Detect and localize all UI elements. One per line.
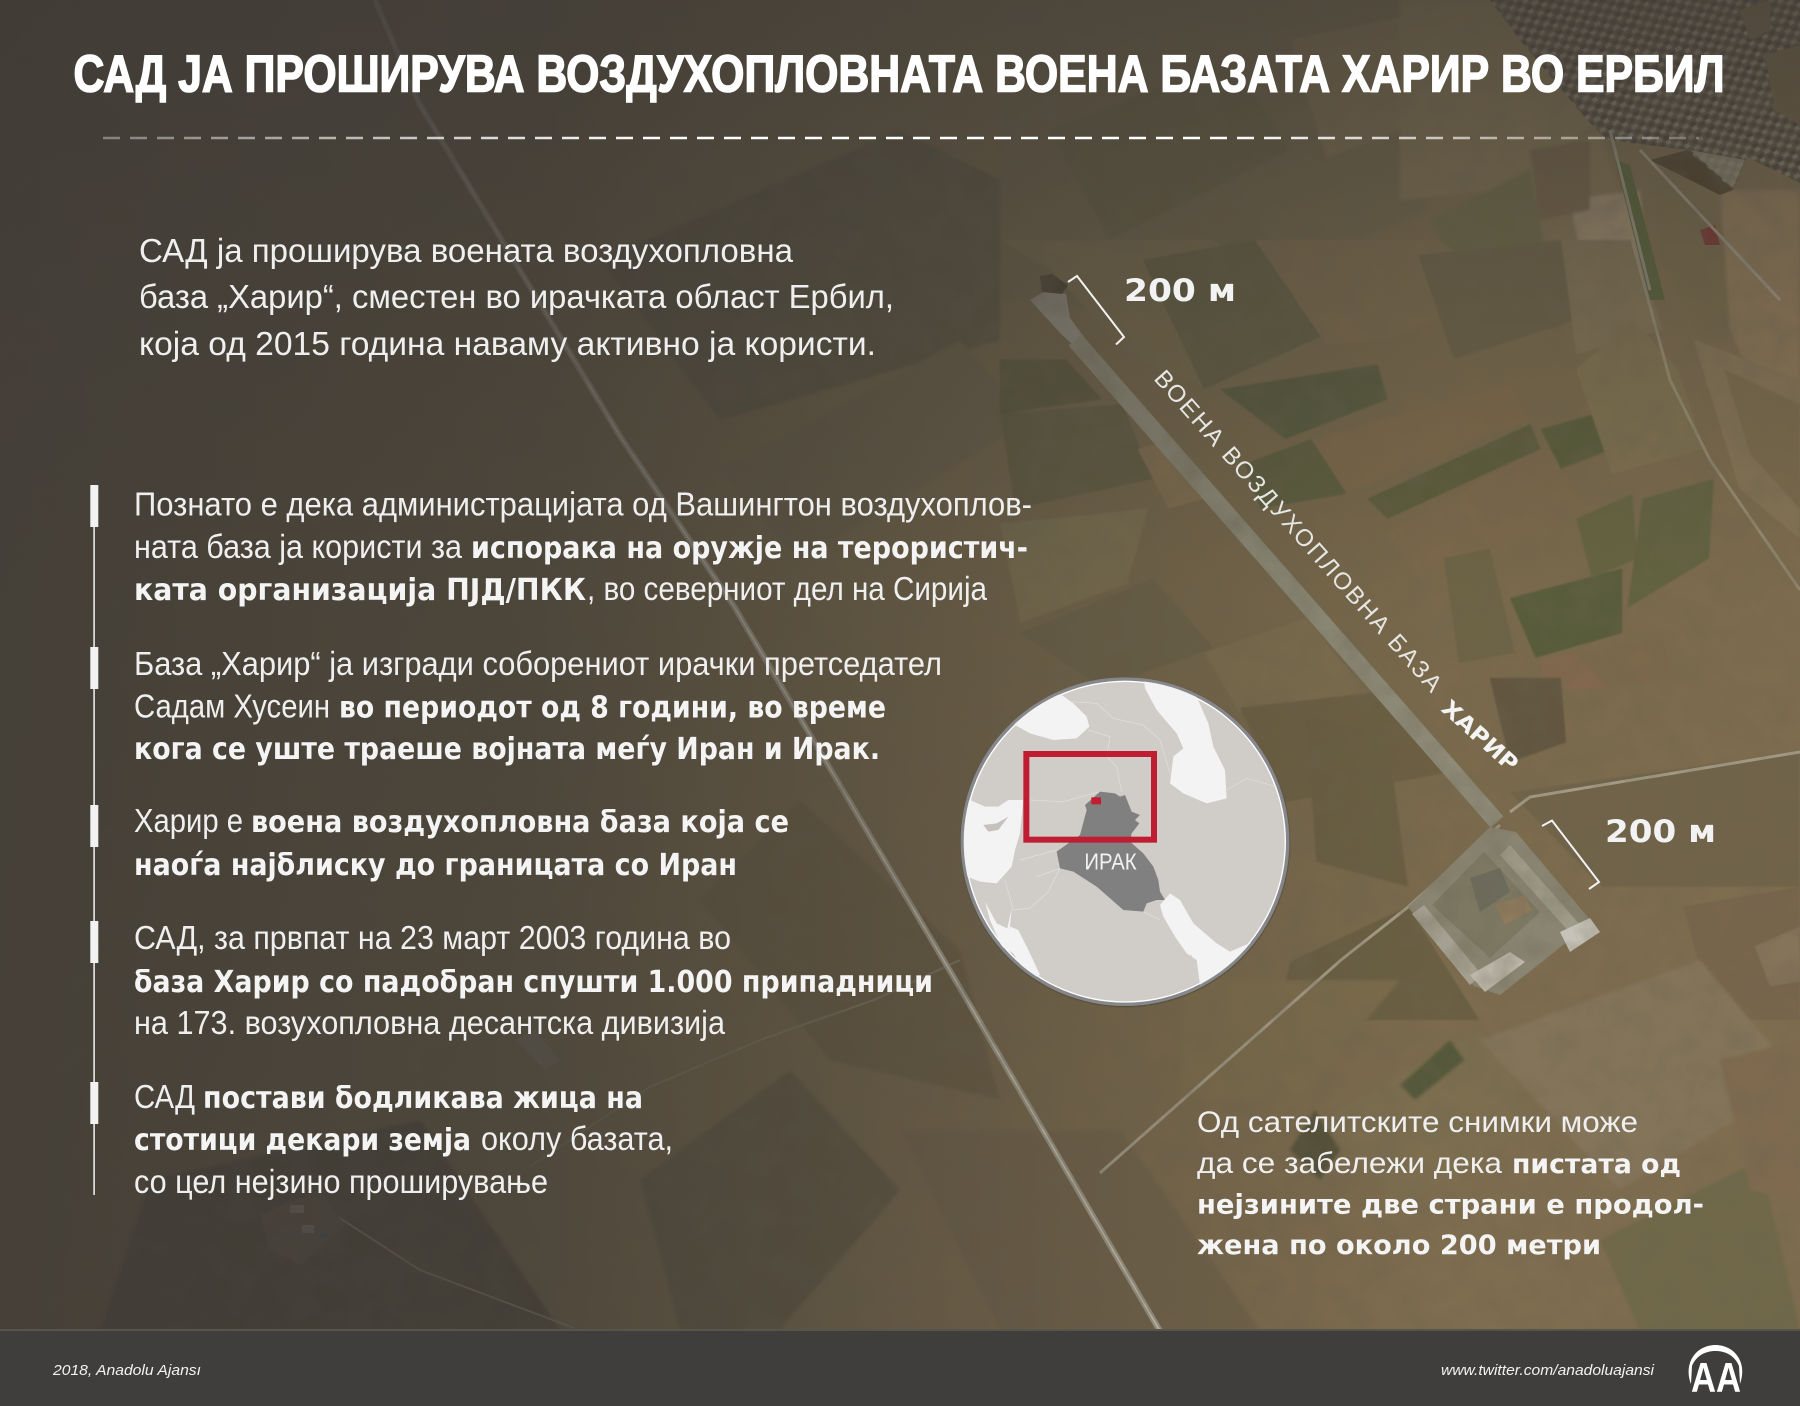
- intro text: [139, 232, 894, 362]
- fact 3: наоѓа најблиску до границата со Иран: [134, 848, 737, 883]
- fact 2: Садам Хусеин: [134, 688, 330, 724]
- satellite note text: жена по около 200 метри: [1197, 1230, 1601, 1261]
- fact 5: со цел нејзино проширување: [134, 1163, 548, 1200]
- fact 1: ната база ја користи за: [134, 528, 463, 565]
- fact 1: испорака на оружје на терористич-: [471, 531, 1028, 566]
- intro text: која од 2015 година наваму активно ја користи.: [139, 325, 876, 362]
- satellite note text: пистата од: [1512, 1149, 1681, 1180]
- borders: [1005, 702, 1277, 920]
- fact 2: во периодот од 8 години, во време: [339, 690, 886, 726]
- fact 2: База „Харир“ ја изгради соборениот ирачки претседател: [134, 645, 942, 682]
- farm fields, lower plain: [100, 800, 1800, 1330]
- runway: [1030, 274, 1497, 822]
- fact 4: [134, 919, 933, 1041]
- fact 5: стотици декари земја: [134, 1123, 471, 1158]
- fact 4: на 173. возухопловна десантска дивизија: [134, 1004, 726, 1041]
- red base marker: [1091, 797, 1101, 804]
- label: 200 m north: 200 м: [1124, 273, 1236, 309]
- fact 3: Харир е: [134, 802, 243, 839]
- runway label: ХАРИР: [1436, 696, 1523, 777]
- military base compound: [1408, 827, 1600, 995]
- logo: Anadolu Agency: AA: [1691, 1354, 1741, 1401]
- fact 2: [134, 645, 942, 767]
- fact 3: [134, 802, 789, 883]
- fact 5: околу базата,: [481, 1120, 673, 1157]
- label: 200 m south: 200 м: [1605, 814, 1716, 850]
- red inset frame: [1026, 754, 1154, 840]
- fact 4: база Харир со падобран спушти 1.000 припадници: [134, 965, 933, 1000]
- fact 1: Познато е дека администрацијата од Вашингтон воздухоплов-: [134, 486, 1032, 522]
- fact 5: САД: [134, 1078, 195, 1115]
- intro text: САД ја проширува воената воздухопловна: [139, 232, 794, 269]
- runway label: [1149, 365, 1523, 777]
- fact 4: САД, за првпат на 23 март 2003 година во: [134, 919, 731, 956]
- highway: [375, 0, 1160, 1331]
- satellite note text: да се забележи дека: [1197, 1147, 1502, 1180]
- satellite note text: Од сателитските снимки може: [1197, 1106, 1638, 1139]
- fact 1: [134, 486, 1032, 608]
- fact 5: постави бодликава жица на: [203, 1081, 643, 1116]
- farm fields around runway: [1000, 240, 1800, 1020]
- timeline line with ticks: [90, 485, 98, 1195]
- seas: [950, 677, 1263, 985]
- farm fields, upper plain: [600, 0, 1800, 560]
- village, lower left: [260, 1030, 560, 1265]
- fact 2: кога се уште траеше војната меѓу Иран и Ирак.: [134, 732, 880, 767]
- bracket: south extension: [1542, 820, 1599, 889]
- satellite note text: нејзините две страни е продол-: [1197, 1190, 1704, 1220]
- locator globe map: [950, 677, 1289, 1006]
- fact 5: [134, 1078, 673, 1200]
- fact 1: , во северниот дел на Сирија: [587, 570, 988, 607]
- country roads: [338, 240, 1800, 1328]
- dashed divider: [103, 137, 1699, 139]
- intro text: база „Харир“, сместен во ирачката област Ербил,: [139, 278, 894, 315]
- town, top right: [1490, 0, 1800, 300]
- Iraq: [1057, 792, 1165, 912]
- footer bar: [0, 1329, 1800, 1406]
- bracket: north extension: [1068, 276, 1124, 344]
- fact 3: воена воздухопловна база која се: [251, 805, 789, 840]
- credit: 2018, Anadolu Ajansı: [52, 1362, 201, 1379]
- twitter url: www.twitter.com/anadoluajansi: [1441, 1362, 1655, 1379]
- fact 1: ката организација ПЈД/ПКК: [134, 573, 586, 608]
- satellite note text: [1197, 1106, 1704, 1261]
- label: Iraq: ИРАК: [1084, 848, 1137, 874]
- runway label: ВОЕНА ВОЗДУХОПЛОВНА БАЗА: [1149, 365, 1447, 698]
